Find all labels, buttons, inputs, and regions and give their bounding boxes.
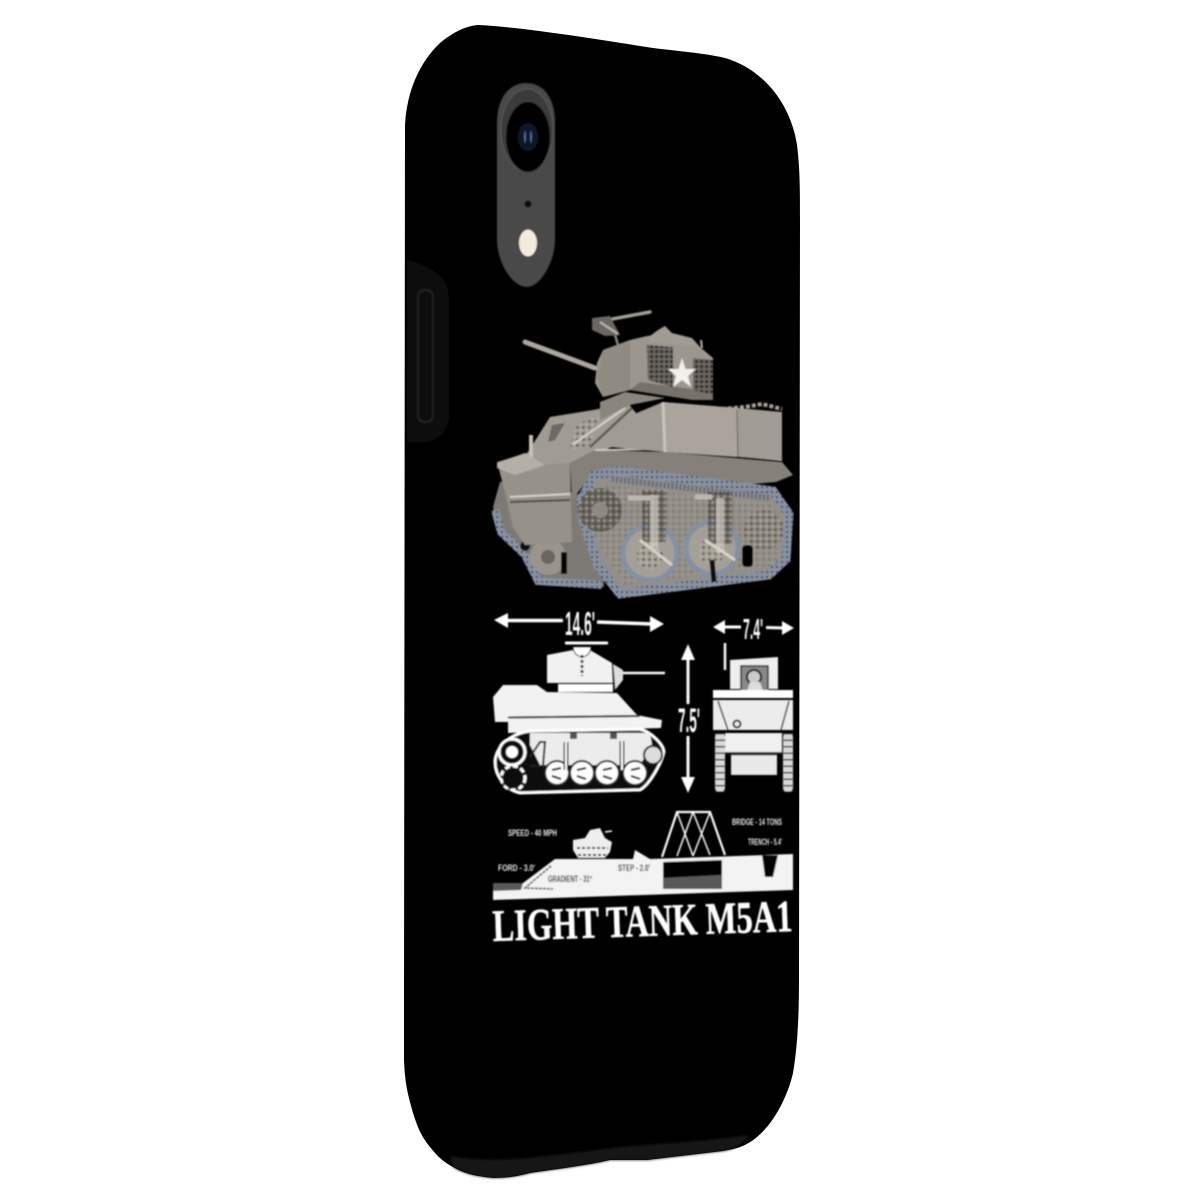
label: step: STEP - 2.0'	[618, 863, 650, 874]
ford water	[493, 883, 523, 891]
sponson plates	[610, 402, 782, 460]
turret cupola	[565, 642, 608, 644]
lower side hull	[570, 450, 793, 500]
performance diagram	[493, 812, 793, 900]
side button	[418, 290, 433, 422]
microphone	[524, 200, 532, 208]
title: LIGHT TANK M5A1	[492, 891, 793, 951]
dimension arrow: width: 7.4'	[743, 614, 763, 646]
phone case body	[404, 25, 800, 1178]
terrain	[493, 850, 793, 900]
lens	[506, 102, 550, 172]
side view schematic	[493, 605, 665, 793]
label: bridge: BRIDGE - 14 TONS	[732, 817, 782, 827]
gun	[623, 672, 665, 674]
machine gun	[592, 312, 650, 345]
idler wheel	[744, 510, 784, 550]
hatch	[650, 326, 700, 347]
label: speed: SPEED - 40 MPH	[508, 828, 557, 838]
trench	[762, 855, 778, 877]
sprocket	[578, 488, 622, 532]
front lower hull	[497, 455, 572, 545]
bottom rim highlight	[450, 1135, 750, 1178]
front view schematic	[713, 614, 794, 792]
height dimension arrow	[678, 644, 700, 793]
illustrated tank	[493, 312, 793, 597]
dimension arrow: length: 14.6'	[565, 605, 595, 642]
side button bump	[407, 260, 449, 442]
near track	[580, 470, 790, 597]
dimension arrow: length	[494, 605, 664, 642]
turret grille right	[693, 358, 713, 395]
label: trench: TRENCH - 5.4'	[748, 837, 782, 847]
label: ford: FORD - 3.0'	[498, 863, 535, 874]
bridge	[662, 812, 725, 857]
front turret	[725, 643, 778, 695]
turret	[525, 326, 713, 420]
road wheels and bogies	[623, 490, 753, 582]
lens ring	[501, 89, 553, 171]
river gap	[663, 860, 722, 889]
flash	[518, 229, 538, 257]
main gun	[525, 342, 595, 368]
gradient marker	[525, 866, 553, 889]
small tank	[573, 828, 612, 858]
front tracks	[715, 733, 793, 792]
front fender	[497, 453, 545, 475]
camera module	[497, 83, 555, 287]
hull	[493, 685, 662, 733]
dimension arrow: width	[713, 614, 794, 646]
white star	[668, 358, 696, 387]
driver hatches	[529, 408, 632, 459]
front hull	[713, 690, 793, 775]
turret grille left	[647, 345, 673, 387]
far track	[493, 480, 604, 587]
phone case infographic: 7.5'	[678, 702, 700, 740]
glacis plate	[510, 403, 640, 467]
turret	[547, 647, 623, 692]
running gear	[495, 729, 664, 793]
label: gradient: GRADIENT - 31°	[548, 874, 592, 885]
